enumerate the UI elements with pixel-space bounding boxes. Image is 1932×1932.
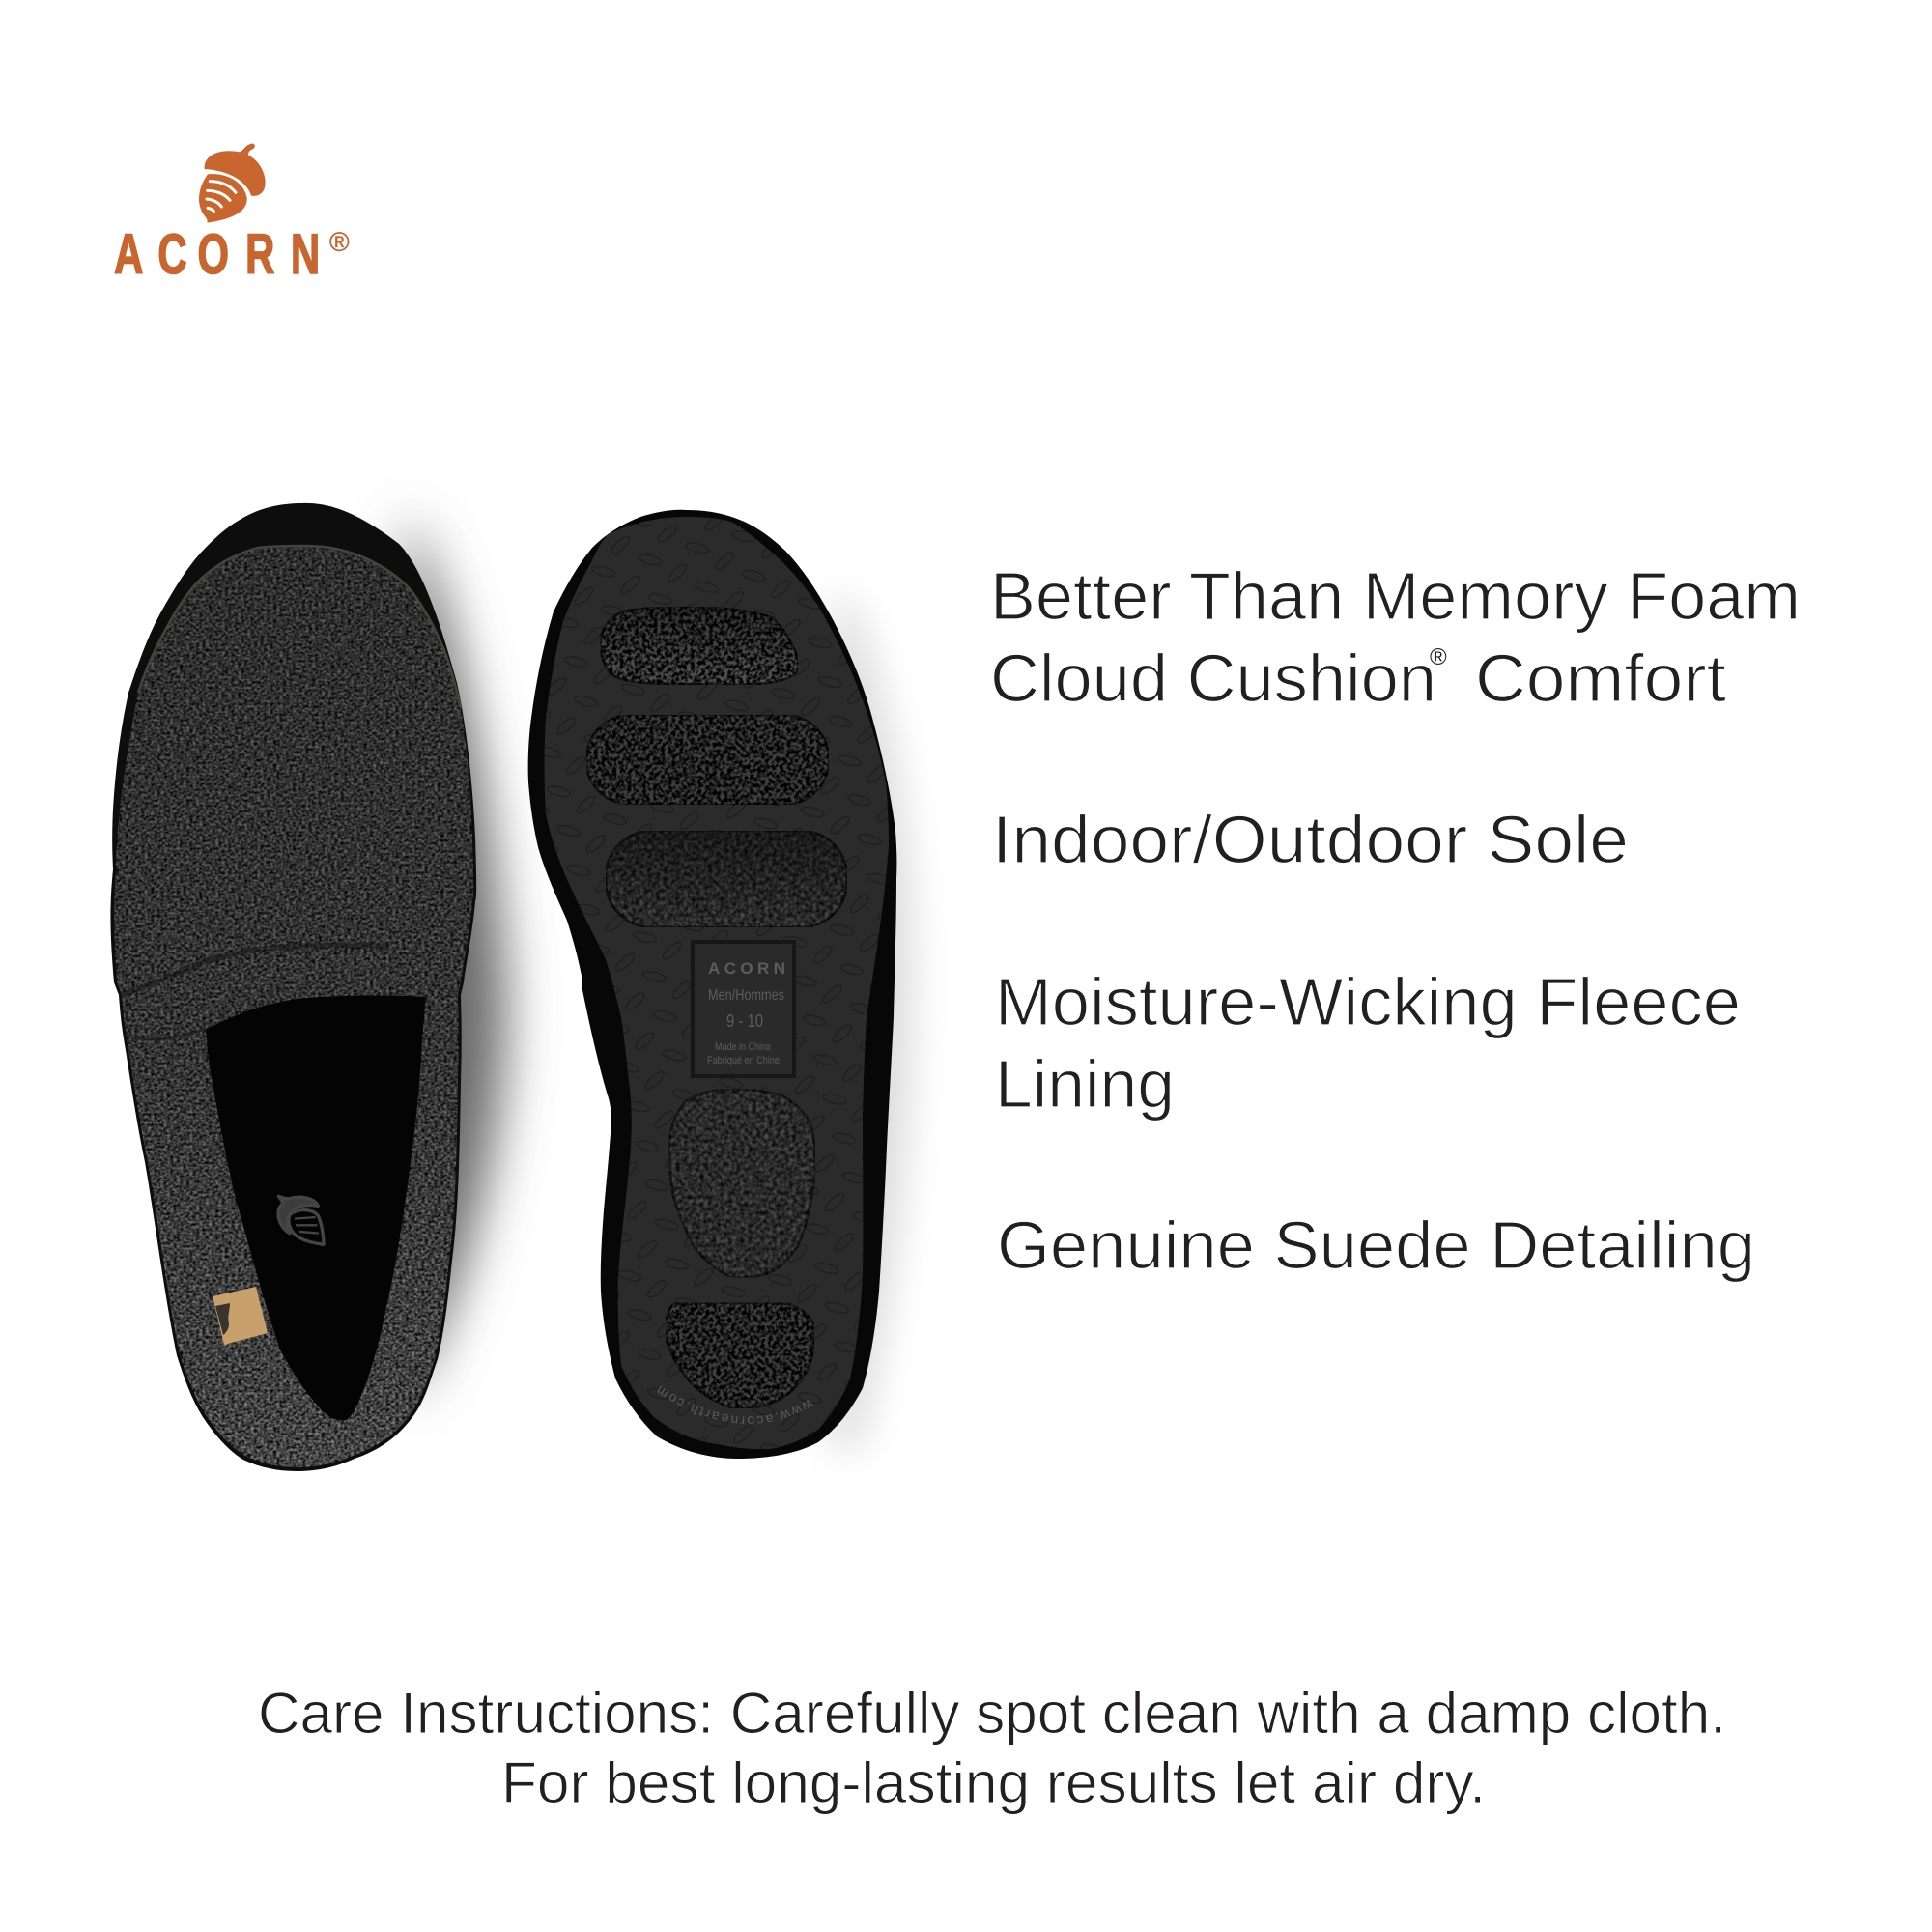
slipper sole rim	[110, 503, 476, 1471]
feature: fleece lining	[995, 964, 1741, 1122]
toe stitch line	[138, 546, 461, 708]
rear tread pad	[666, 1302, 814, 1408]
ball tread pad	[606, 831, 847, 927]
feature: cloud cushion comfort: ®	[1430, 644, 1447, 670]
moulded label text: Men/Hommes	[708, 987, 784, 1004]
icon: acorn	[199, 144, 266, 223]
rubber outsole	[545, 517, 889, 1449]
registered mark: ®	[329, 227, 350, 257]
feature: sole: Indoor/Outdoor Sole	[992, 802, 1629, 877]
care instructions: For best long-lasting results let air dry.	[501, 1750, 1486, 1815]
heel tread pad	[669, 1090, 815, 1277]
collar lower edge	[124, 1029, 206, 1039]
feature: fleece lining: Moisture-Wicking Fleece	[995, 964, 1741, 1039]
toe tread pad	[601, 607, 798, 685]
tab acorn print	[215, 1303, 230, 1335]
brand logo	[114, 144, 350, 286]
moulded label text: ACORN	[708, 959, 785, 978]
feature: suede: Genuine Suede Detailing	[997, 1208, 1755, 1283]
insole acorn mark	[278, 1196, 324, 1244]
knit upper and heel	[114, 546, 473, 1467]
soft product shadows	[406, 522, 913, 1449]
moulded web address: www.acornearth.com	[657, 1385, 813, 1424]
left slipper, top view	[110, 503, 476, 1471]
feature: cloud cushion comfort: Better Than Memory Foam	[990, 558, 1801, 634]
feature list	[990, 558, 1801, 1283]
wordmark: ACORN	[114, 222, 320, 286]
moulded label text: 9 - 10	[726, 1011, 763, 1031]
feature: cloud cushion comfort: Cloud Cushion	[990, 640, 1436, 716]
feature: fleece lining: Lining	[995, 1046, 1175, 1122]
size label panel	[693, 942, 794, 1076]
suede outer rim	[528, 510, 896, 1459]
fleece lining	[206, 995, 425, 1421]
feature: cloud cushion comfort	[990, 558, 1801, 716]
collar fold	[120, 945, 386, 995]
care instructions	[258, 1681, 1726, 1815]
suede pull tab	[213, 1287, 268, 1345]
forefoot tread pad	[586, 715, 829, 805]
moulded label text: Fabriqué en Chine	[707, 1055, 780, 1066]
moulded label text	[707, 959, 785, 1066]
feature: cloud cushion comfort: Comfort	[1475, 640, 1726, 716]
moulded label text: Made in China	[715, 1041, 772, 1053]
care instructions: Care Instructions: Carefully spot clean with a damp cloth.	[258, 1681, 1726, 1746]
right slipper, sole view	[528, 510, 896, 1459]
